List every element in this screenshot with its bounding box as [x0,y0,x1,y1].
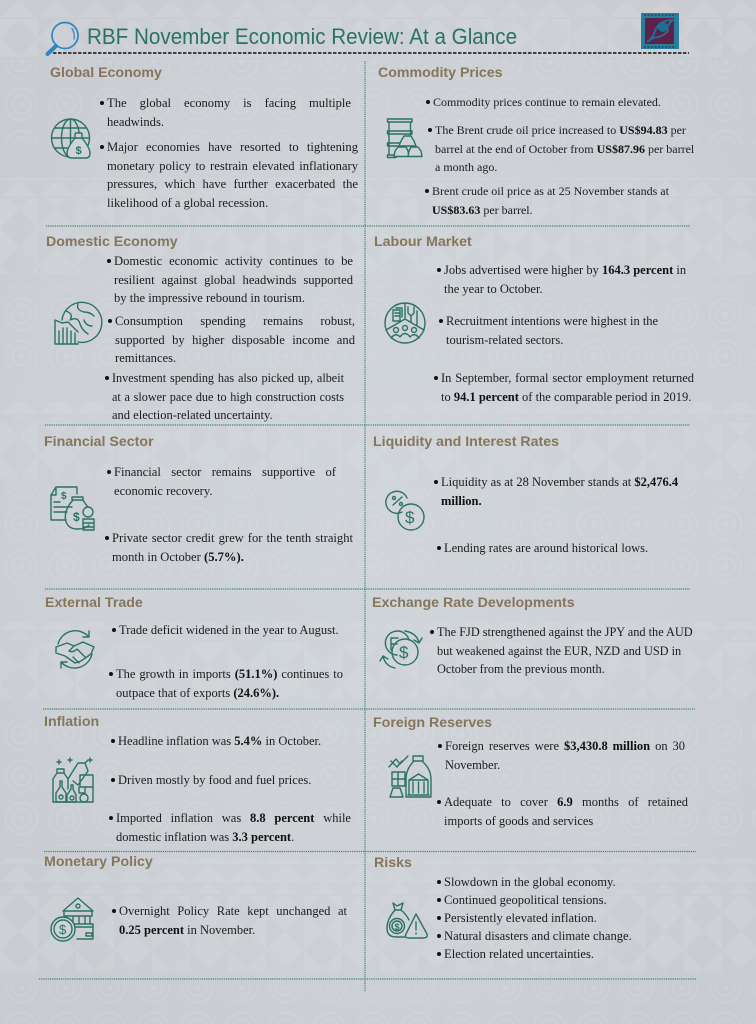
icon: currency exchange [379,630,423,669]
text: import cover [444,793,688,830]
text: jobs: the year to October. [444,282,543,296]
text: recruitment: tourism-related sectors. [446,332,563,346]
text: resilient: resilient against global headwinds supported [114,272,353,286]
text: policy rate: Overnight Policy Rate kept unchanged at [119,904,347,918]
panel: Global Economy [50,65,358,210]
text: Brent November: Brent crude oil price as at 25 November stands at [432,184,669,198]
text: risk 1: Slowdown in the global economy. [444,875,616,889]
text: resilient: Domestic economic activity continues to be [114,254,353,268]
heading: Risks [374,855,412,871]
text: resilient [114,252,353,308]
text: risk 5: Election related uncertainties. [444,947,594,961]
text: deficit: Trade deficit widened in the year to August. [119,623,339,637]
text: investment: and election-related uncertainty. [112,408,273,422]
text: employment [441,369,694,406]
icon: document and money bag: $ [61,491,67,502]
icon: consumer goods with price tag [52,757,94,803]
text: reserves: Foreign reserves were $3,430.8 million on 30 [445,739,685,753]
heading: Foreign Reserves [373,715,492,731]
heading: Exchange Rate Developments [372,595,575,611]
icon: globe with money bag [50,118,91,159]
panel: Risks [374,855,632,961]
icon: percent and dollar coins: $ [405,508,415,527]
text: risk 4: Natural disasters and climate change. [444,929,632,943]
text: risk 2: Continued geopolitical tensions. [444,893,607,907]
text: jobs [444,261,686,298]
title underline [53,52,689,54]
text: supportive: Financial sector remains supportive of [114,465,336,479]
text: policy rate: 0.25 percent in November. [119,922,255,936]
icon: oil barrel and gold bars [386,118,423,158]
heading: External Trade [45,595,143,611]
text: employment: In September, formal sector employment returned [441,371,694,385]
text: headwinds: headwinds. [107,114,164,128]
icon: percent and dollar coins [385,490,425,531]
header: title bar [45,13,689,56]
text: monetary tightening: Major economies have resorted to tightening [107,140,358,154]
text: monetary tightening [107,138,358,212]
text: recruitment [446,312,658,349]
text: import cover: imports of goods and services [444,814,593,828]
text: Brent October: The Brent crude oil price increased to US$94.83 per [435,123,686,137]
text: Brent October: barrel at the end of October from US$87.96 per barrel [435,142,694,156]
panel: Labour Market [374,234,694,404]
text: headwinds: The global economy is facing multiple [107,96,351,110]
text: monetary tightening: likelihood of a global recession. [107,196,268,210]
text: investment [112,369,344,424]
icon: bank, coin and card: $ [59,922,67,937]
heading: Commodity Prices [378,65,503,81]
text: FJD [437,623,693,678]
heading: Liquidity and Interest Rates [373,434,559,450]
text: headwinds [107,94,351,131]
icon: magnifying glass [45,22,79,56]
icon: handshake with arrows [55,630,95,669]
icon: bank, coin and card [50,897,94,942]
text: Brent October [435,121,694,176]
icon: money bag and warning triangle: $ [394,922,400,932]
text: Brent November [432,182,669,219]
text: investment: at a slower pace due to high construction costs [112,390,344,404]
text: reserves [445,737,685,774]
text: FJD: but weakened against the EUR, NZD and USD in [437,644,681,658]
text: resilient: by the impressive rebound in tourism. [114,291,305,305]
heading: Financial Sector [44,434,154,450]
text: policy rate [119,902,347,939]
panel: Financial Sector [44,434,353,564]
panel: Foreign Reserves [373,715,688,828]
panel: Domestic Economy [46,234,355,422]
text: supportive: economic recovery. [114,484,212,498]
heading: Monetary Policy [44,854,153,870]
text: private credit [112,529,353,566]
text: imported [116,809,351,846]
icon: globe with money bag: $ [76,145,82,157]
text: consumption: remittances. [115,351,176,365]
text: imported: Imported inflation was 8.8 percent while [116,811,351,825]
text: monetary tightening: pressures, which have further exacerbated the [107,177,358,191]
text: import cover: Adequate to cover 6.9 months of retained [444,795,688,809]
panel: Monetary Policy [44,854,347,942]
text: headline: Headline inflation was 5.4% in October. [118,734,321,748]
icon: workers and tools in circle [384,302,426,344]
text: Brent October: a month ago. [435,160,497,174]
text: risk 3: Persistently elevated inflation. [444,911,597,925]
logo [641,13,679,49]
text: imports [116,665,343,702]
icon: document and money bag [50,486,95,531]
text: elevated: Commodity prices continue to remain elevated. [433,95,661,109]
text: Brent November: US$83.63 per barrel. [432,202,533,216]
text: jobs: Jobs advertised were higher by 164.3 percent in [444,263,686,277]
text: investment: Investment spending has also picked up, albeit [112,371,344,385]
text: private credit: Private sector credit grew for the tenth straight [112,531,353,545]
panel: Exchange Rate Developments [372,595,693,676]
text: liquidity: million. [441,494,482,508]
heading: Inflation [44,714,99,730]
panel: External Trade [45,595,343,700]
icon: document and money bag: $ [73,510,80,524]
heading: Domestic Economy [46,234,178,250]
text: FJD: October from the previous month. [437,662,605,676]
panel: Liquidity and Interest Rates [373,434,678,555]
text: lending rates: Lending rates are around historical lows. [444,541,648,555]
icon: earth with bar chart [54,302,103,345]
text: consumption: supported by higher disposable income and [115,332,355,346]
text: imports: outpace that of exports (24.6%). [116,686,279,700]
text: imports: The growth in imports (51.1%) continues to [116,667,343,681]
text: liquidity: Liquidity as at 28 November stands at $2,476.4 [441,475,678,489]
text: FJD: The FJD strengthened against the JPY and the AUD [437,625,693,639]
text: liquidity [441,473,678,510]
icon: reserves bag, bank and chart [388,755,432,798]
text: reserves: November. [445,758,500,772]
text: recruitment: Recruitment intentions were highest in the [446,314,658,328]
text: imported: domestic inflation was 3.3 percent. [116,830,294,844]
panel: Inflation [44,714,351,844]
text: consumption [115,312,355,368]
text: consumption: Consumption spending remains robust, [115,314,355,328]
text: monetary tightening: monetary policy to restrain elevated inflationary [107,158,358,172]
text: supportive [114,463,336,500]
panel: Commodity Prices [378,65,694,216]
text: private credit: month in October (5.7%). [112,550,244,564]
heading: Labour Market [374,234,472,250]
heading: Global Economy [50,65,162,81]
text: drivers: Driven mostly by food and fuel prices. [118,773,311,787]
icon: currency exchange: $ [399,643,409,662]
icon: money bag and warning triangle [386,902,428,939]
text: employment: to 94.1 percent of the comparable period in 2019. [441,390,691,404]
title: RBF November Economic Review: At a Glance [87,24,517,49]
